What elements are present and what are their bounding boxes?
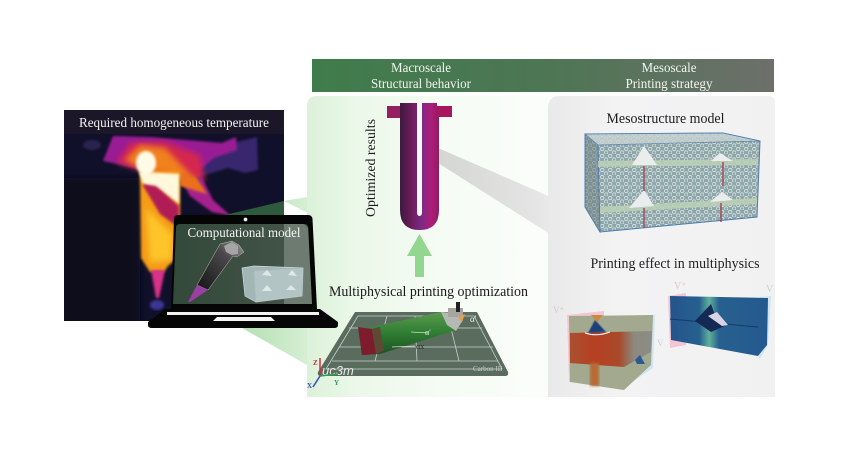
infographic (64, 59, 775, 397)
V plane pink (567, 311, 604, 382)
arrow: upward green (407, 234, 432, 277)
green projection beam from laptop (242, 197, 320, 365)
logo: uc3m: uc3m (322, 363, 354, 378)
webcam (244, 218, 248, 222)
simulation cube: right (668, 281, 774, 360)
label: multiphysical printing optimization: Multiphysical printing optimization (329, 284, 529, 300)
heading: printing effect in multiphysics: Printing effect in multiphysics (590, 256, 760, 272)
thermal image panel (60, 110, 290, 328)
print bed (318, 312, 508, 378)
V plane pink (668, 293, 686, 348)
laptop display (173, 224, 312, 304)
angle label alpha x: αx (416, 342, 424, 351)
caption: required homogeneous temperature: Required homogeneous temperature (79, 116, 269, 131)
axis letter Z: Z (313, 359, 318, 367)
axis letter X: X (307, 382, 312, 390)
grey projection beam (438, 148, 553, 236)
mini mesostructure block (242, 266, 303, 302)
heading: structural behavior: Structural behavior (371, 77, 471, 92)
heading: macroscale: Macroscale (391, 61, 451, 76)
axes triad (307, 358, 339, 390)
panel: macroscale green background (307, 96, 548, 397)
header bar (312, 59, 774, 92)
logo: Carbon 3D: Carbon III (473, 365, 503, 373)
caption: computational model: Computational model (188, 225, 301, 240)
panel: mesoscale grey background (548, 96, 775, 397)
laptop base (148, 309, 338, 328)
heading: mesostructure model: Mesostructure model (606, 111, 724, 127)
laptop (148, 215, 338, 328)
label V plus right: V⁺ (674, 281, 686, 292)
mesostructure block (585, 133, 760, 232)
laptop screen frame (171, 215, 317, 309)
label: optimized results: Optimized results (364, 119, 379, 217)
mini syringe (188, 241, 244, 302)
angle label alpha z: α' (470, 314, 477, 324)
V plane blue (620, 315, 655, 390)
simulation cube: left (553, 305, 664, 390)
print head syringe (358, 302, 477, 355)
label V plus left: V⁺ (553, 305, 564, 315)
heading: printing strategy: Printing strategy (626, 77, 712, 92)
label V minus left: V (657, 338, 664, 348)
optimized part: U shape (387, 103, 452, 230)
axis letter Y: Y (334, 379, 339, 387)
heading: mesoscale: Mesoscale (642, 61, 696, 76)
angle label alpha: α' (425, 328, 431, 337)
label V minus right: V (766, 284, 774, 295)
V plane blue (759, 296, 771, 360)
